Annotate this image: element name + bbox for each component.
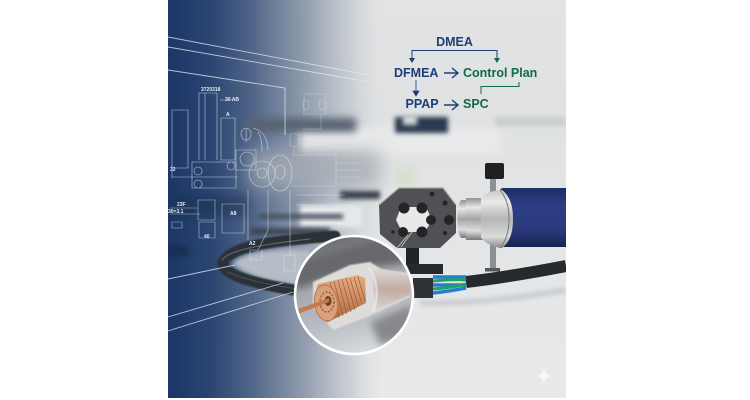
arrow: DFMEA to PPAP <box>413 80 419 96</box>
node: DMEA: DMEA <box>436 35 473 49</box>
blueprint faded right part <box>290 94 362 186</box>
translucent ferrule <box>313 262 410 330</box>
connector: Control Plan to SPC <box>481 82 519 94</box>
blueprint dimension labels: 40 <box>204 234 210 240</box>
cable and colored wire bundle <box>413 266 566 293</box>
blueprint dimension labels: 3720318 <box>201 87 221 93</box>
node: SPC: SPC <box>463 97 489 111</box>
connector: DMEA to DFMEA and Control Plan <box>412 50 497 58</box>
blueprint dimension labels: 30 AB <box>225 97 239 103</box>
arrowhead: to DFMEA <box>409 58 415 63</box>
blueprint line drawing <box>168 37 370 331</box>
node: DFMEA: DFMEA <box>394 66 438 80</box>
blue hydraulic cylinder <box>495 188 566 247</box>
arrow: DFMEA to Control Plan <box>444 68 458 78</box>
arrowhead: to Control Plan <box>494 58 500 63</box>
blueprint dimension labels: A8 <box>230 211 237 217</box>
blueprint dimension labels <box>168 87 256 247</box>
blurred workbench background <box>168 115 566 285</box>
blueprint dimension labels: 23F <box>177 202 186 208</box>
center conductor <box>298 298 329 314</box>
photo panel <box>168 0 566 400</box>
flow diagram <box>394 35 537 111</box>
navy fade overlay <box>168 0 383 400</box>
blueprint dimension labels: 30=3.1 <box>168 209 184 215</box>
black cable loop <box>222 236 335 291</box>
watermark sparkle <box>536 368 552 384</box>
steel collar <box>457 190 513 248</box>
blueprint dimension labels: A2 <box>249 241 256 247</box>
blueprint dimension labels: A <box>226 112 230 118</box>
node: PPAP: PPAP <box>406 97 439 111</box>
infographic canvas <box>168 0 566 398</box>
cable shadow <box>420 290 566 303</box>
blueprint dimension labels: 32 <box>170 167 176 173</box>
blueprint lower part <box>170 190 356 271</box>
magnified wire inset <box>295 236 413 354</box>
crimping head <box>379 188 456 274</box>
node: Control Plan: Control Plan <box>463 66 537 80</box>
stand post <box>485 163 504 272</box>
copper strands <box>316 275 366 322</box>
arrow: PPAP to SPC <box>444 100 458 110</box>
